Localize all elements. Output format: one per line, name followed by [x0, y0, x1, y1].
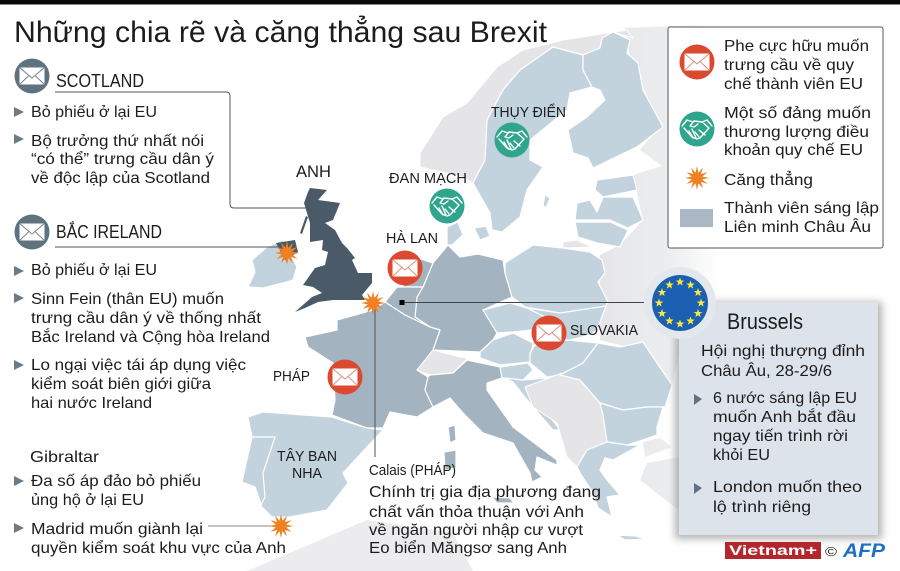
panel: legend — [668, 27, 883, 248]
icon: Scotland envelope — [14, 58, 50, 94]
subheading: summit: Châu Âu, 28-29/6 — [701, 361, 832, 380]
subheading: summit: Hội nghị thượng đỉnh — [701, 343, 865, 360]
logo: Vietnam+ and AFP — [725, 541, 885, 562]
leader line: Brussels — [402, 302, 650, 304]
label: Spain: TÂY BAN — [277, 448, 337, 465]
icon: tension star Gibraltar — [269, 514, 293, 538]
text block: Calais: Calais (PHÁP) — [369, 462, 456, 479]
marker: Netherlands — [386, 230, 438, 286]
legend: far right: chế thành viên EU — [724, 76, 863, 93]
bullets: Northern Ireland — [14, 262, 270, 412]
bullets: Gibraltar: Madrid muốn giành lại — [31, 521, 203, 538]
UK — [295, 188, 372, 312]
leader line: Gibraltar — [208, 525, 272, 527]
bullets: Gibraltar: Đa số áp đảo bỏ phiếu — [31, 473, 201, 490]
heading: Northern Ireland: BẮC IRELAND — [56, 221, 162, 242]
legend: negotiating parties: khoản quy chế EU — [724, 142, 863, 159]
panel: Gibraltar — [14, 449, 286, 557]
label: Anh: ANH — [296, 162, 331, 181]
marker: Sweden: THỤY ĐIỂN — [491, 103, 566, 121]
legend: founding members: Thành viên sáng lập — [724, 200, 879, 217]
logo: Vietnam+ and AFP: Vietnam+ — [729, 542, 817, 558]
legend: negotiating parties — [680, 105, 871, 159]
bullets: Brussels: muốn Anh bắt đầu — [713, 407, 856, 426]
label: Spain: NHA — [292, 465, 322, 482]
icon: Northern Ireland envelope — [14, 214, 50, 250]
bullets: Northern Ireland: trưng cầu dân ý về thống nhất — [31, 310, 262, 327]
text block: Calais: về ngăn người nhập cư vượt — [369, 522, 584, 539]
leader line: Scotland — [55, 92, 310, 208]
marker: Slovakia: SLOVAKIA — [570, 323, 638, 339]
bullets: Gibraltar — [14, 473, 286, 557]
legend: tension — [685, 166, 813, 190]
text block: Calais: chất vấn thỏa thuận với Anh — [369, 504, 584, 521]
marker: Brussels square — [400, 300, 404, 305]
bullets: Gibraltar: ủng hộ ở lại EU — [31, 492, 144, 509]
logo: Vietnam+ and AFP: AFP — [842, 541, 885, 562]
legend: negotiating parties: thương lượng điều — [724, 124, 869, 141]
marker: France: PHÁP — [273, 368, 310, 385]
bullets: Brussels: ngay tiến trình rời — [713, 428, 848, 445]
map of Europe — [242, 24, 720, 571]
icon: tension star Calais — [361, 291, 385, 315]
subheading: summit — [701, 343, 865, 380]
icon: EU flag — [644, 267, 716, 339]
top bar — [0, 0, 900, 4]
marker: France — [273, 360, 362, 394]
bullets: Gibraltar: quyền kiểm soát khu vực của Anh — [31, 539, 286, 557]
legend: negotiating parties: Một số đảng muốn — [724, 105, 871, 122]
title: Những chia rẽ và căng thẳng sau Brexit — [14, 15, 548, 49]
bullets: Northern Ireland: Bắc Ireland và Cộng hòa Ireland — [31, 327, 270, 346]
marker: Denmark: ĐAN MẠCH — [389, 170, 467, 187]
leader line: Calais — [374, 303, 376, 457]
legend: founding members — [680, 200, 879, 236]
bullets: Brussels: lộ trình riêng — [713, 499, 811, 516]
heading: Scotland: SCOTLAND — [56, 71, 144, 91]
legend: far right: trưng cầu về quy — [724, 57, 854, 74]
text block: Calais: Chính trị gia địa phương đang — [369, 484, 601, 501]
bullets: Northern Ireland: kiểm soát biên giới giữa — [31, 375, 211, 393]
bullets: Scotland: “có thể” trưng cầu dân ý — [31, 150, 214, 168]
text block: Calais: Eo biển Măngsơ sang Anh — [369, 539, 567, 557]
marker: Denmark — [389, 170, 467, 224]
bullets: Northern Ireland: hai nước Ireland — [31, 395, 152, 412]
panel: Brussels — [644, 267, 882, 539]
bullets: Brussels: khỏi EU — [713, 447, 770, 464]
bullets: Scotland: Bỏ phiếu ở lại EU — [31, 104, 157, 121]
panel: Scotland — [14, 58, 310, 208]
marker: Sweden — [491, 103, 566, 158]
bullets: Northern Ireland: Lo ngại việc tái áp dụng việc — [31, 357, 246, 374]
panel: Northern Ireland — [14, 214, 278, 412]
icon: tension star Ireland — [275, 241, 299, 265]
legend: tension: Căng thẳng — [724, 170, 813, 189]
label: Spain — [277, 448, 337, 482]
heading: Gibraltar: Gibraltar — [30, 449, 100, 466]
bullets: Northern Ireland: Sinn Fein (thân EU) muốn — [31, 291, 224, 308]
legend: far right: Phe cực hữu muốn — [724, 38, 869, 55]
bullets: Brussels — [694, 390, 862, 516]
text block: Calais — [369, 462, 601, 557]
heading: Brussels: Brussels — [727, 309, 803, 334]
legend: founding members: Liên minh Châu Âu — [724, 217, 871, 236]
bullets: Scotland: Bộ trưởng thứ nhất nói — [31, 133, 204, 150]
marker: Netherlands: HÀ LAN — [386, 230, 438, 247]
bullets: Scotland: về độc lập của Scotland — [31, 170, 210, 187]
marker: Slovakia — [532, 316, 638, 350]
bullets: Northern Ireland: Bỏ phiếu ở lại EU — [31, 262, 157, 279]
bullets: Scotland — [14, 104, 214, 187]
bullets: Brussels: 6 nước sáng lập EU — [713, 390, 857, 407]
legend: far right — [680, 38, 869, 93]
logo: Vietnam+ and AFP: © — [825, 544, 838, 559]
leader line: Northern Ireland — [55, 246, 278, 248]
bullets: Brussels: London muốn theo — [713, 479, 862, 496]
